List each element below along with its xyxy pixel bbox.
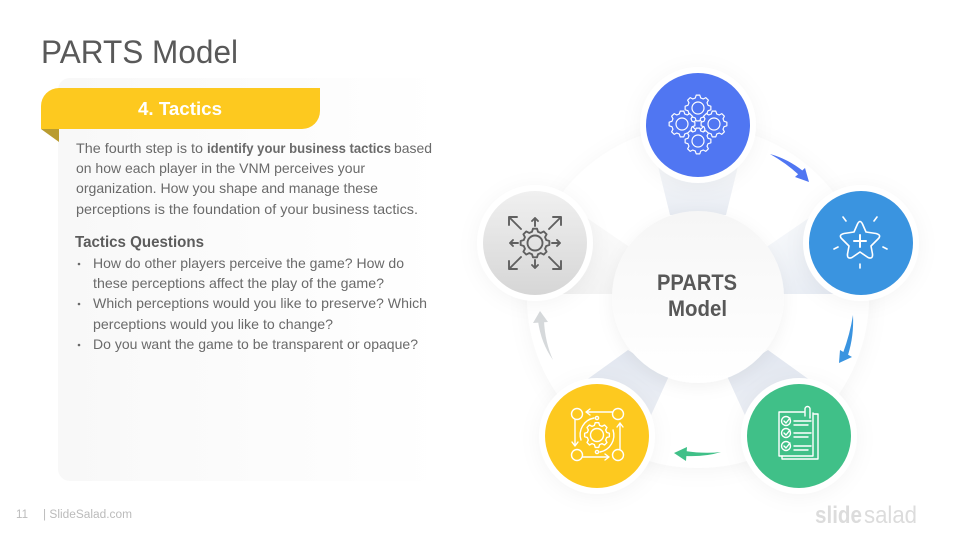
center disc with label: PPARTS	[657, 270, 737, 295]
title: PARTS Model	[41, 34, 238, 70]
node: top blue gears	[640, 67, 756, 183]
arrow: green to yellow	[674, 447, 721, 461]
wedge: left	[526, 207, 631, 294]
text block: intro paragraph	[76, 140, 432, 217]
text block: intro paragraph: perceptions is the foundation of your business tactics.	[76, 201, 418, 217]
logo: slidesalad: slide	[815, 502, 862, 529]
bullet list: questions: How do other players perceive the game? How do	[93, 255, 404, 271]
diagram: PPARTS cycle	[477, 67, 919, 494]
banner: 4. Tactics: 4. Tactics	[138, 99, 222, 119]
center disc with label	[612, 211, 784, 383]
text block: intro paragraph: on how each player in the VNM perceives your	[76, 160, 365, 176]
heading: Tactics Questions: Tactics Questions	[75, 234, 204, 251]
wedge: top	[654, 150, 742, 215]
bullet list: questions: Which perceptions would you like to preserve? Which	[93, 295, 427, 311]
node: left grey gear arrows	[477, 185, 593, 301]
arrow: blue to right node	[770, 154, 809, 182]
footer: page number and site: 11	[16, 509, 28, 521]
banner: 4. Tactics	[41, 88, 320, 142]
text block: intro paragraph: based	[394, 140, 432, 156]
node: right blue star	[803, 185, 919, 301]
logo: slidesalad: salad	[864, 502, 917, 529]
bullet list: questions: these perceptions affect the play of the game?	[93, 275, 384, 291]
bullet list: questions: perceptions would you like to change?	[93, 316, 333, 332]
text block: intro paragraph: organization. How you shape and manage these	[76, 180, 378, 196]
bullet list: questions	[78, 255, 427, 352]
text block: intro paragraph: The fourth step is to	[76, 140, 203, 156]
center disc with label: Model	[668, 296, 727, 321]
bullet list: questions: Do you want the game to be transparent or opaque?	[93, 336, 418, 352]
wedge: bottom right	[727, 350, 825, 470]
logo: slidesalad	[815, 502, 917, 529]
text block: intro paragraph: identify your business tactics	[207, 140, 391, 156]
node: bottom right green checklist	[741, 378, 857, 494]
wedge: bottom left	[571, 350, 669, 470]
footer: page number and site: | SlideSalad.com	[43, 509, 132, 521]
panel: tactics text background	[58, 78, 442, 481]
arrow: yellow to grey	[533, 311, 553, 360]
node: bottom left yellow process	[539, 378, 655, 494]
arrow: right node to green	[839, 315, 853, 363]
background disc	[527, 126, 869, 468]
wedge: right	[765, 207, 870, 294]
